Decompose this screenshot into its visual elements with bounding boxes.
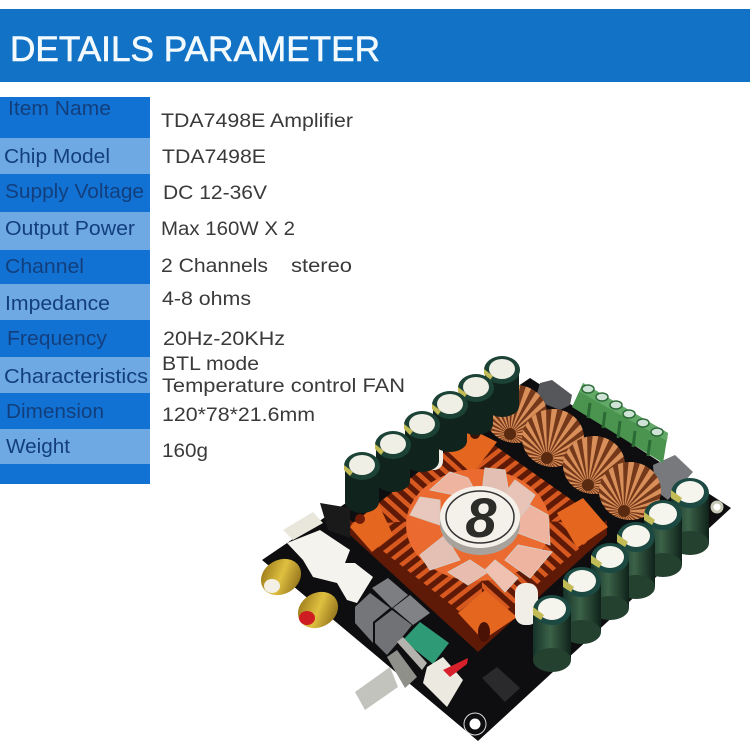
parameter label column: Characteristics: [4, 366, 148, 388]
title: DETAILS PARAMETER: [10, 30, 380, 69]
circuit board: [262, 378, 731, 741]
parameter values: [161, 111, 405, 462]
parameter values: TDA7498E Amplifier: [161, 111, 354, 132]
fan hub: [440, 486, 520, 555]
heatsink corner pads: [350, 430, 608, 640]
parameter values: stereo: [291, 256, 352, 277]
parameter label column: Item Name: [8, 98, 111, 120]
grey film capacitors: [355, 578, 430, 655]
parameter label column: Weight: [6, 436, 70, 458]
heatsink: [350, 429, 608, 652]
parameter values: TDA7498E: [162, 147, 266, 168]
parameter label column: Impedance: [5, 293, 110, 315]
mounting holes: [464, 500, 724, 735]
parameter values: DC 12-36V: [163, 183, 267, 204]
fan blades: [410, 468, 552, 592]
parameter values: 160g: [162, 441, 208, 462]
parameter values: Max 160W X 2: [161, 219, 295, 240]
capacitors top row: [344, 356, 520, 513]
white standoffs: [423, 438, 538, 625]
fan hub: 8: [465, 486, 497, 549]
parameter values: BTL mode: [162, 354, 259, 375]
header banner: [0, 9, 750, 82]
parameter values: 4-8 ohms: [162, 289, 251, 310]
volume knob shaft: [355, 650, 417, 710]
capacitors bottom row: [533, 478, 709, 672]
parameter label column: Supply Voltage: [5, 181, 144, 203]
parameter label column: Frequency: [7, 328, 107, 350]
green screw terminal: [572, 383, 668, 463]
grey connectors: [535, 380, 693, 500]
parameter label column: Chip Model: [4, 146, 110, 168]
parameter label column: Channel: [5, 256, 84, 278]
header pins and white plug: [283, 503, 350, 540]
parameter label column: Dimension: [6, 401, 104, 423]
parameter values: 2 Channels: [161, 256, 268, 277]
green potentiometer: [397, 622, 449, 670]
RCA jack red: [291, 585, 345, 635]
amplifier board photo illustration: [254, 356, 731, 741]
parameter values: Temperature control FAN: [162, 376, 405, 397]
white power connector: [423, 657, 468, 707]
inductor: [482, 667, 520, 702]
heatsink side: [350, 520, 607, 652]
toroidal coils: [482, 384, 662, 539]
RCA jack yellow: [254, 552, 308, 602]
parameter values: 20Hz-20KHz: [163, 329, 285, 350]
parameter values: 120*78*21.6mm: [162, 405, 315, 426]
parameter label column: Output Power: [5, 218, 135, 240]
heatsink centre: [406, 469, 550, 581]
parameter label column: [0, 97, 150, 484]
white RCA housing: [287, 530, 373, 603]
